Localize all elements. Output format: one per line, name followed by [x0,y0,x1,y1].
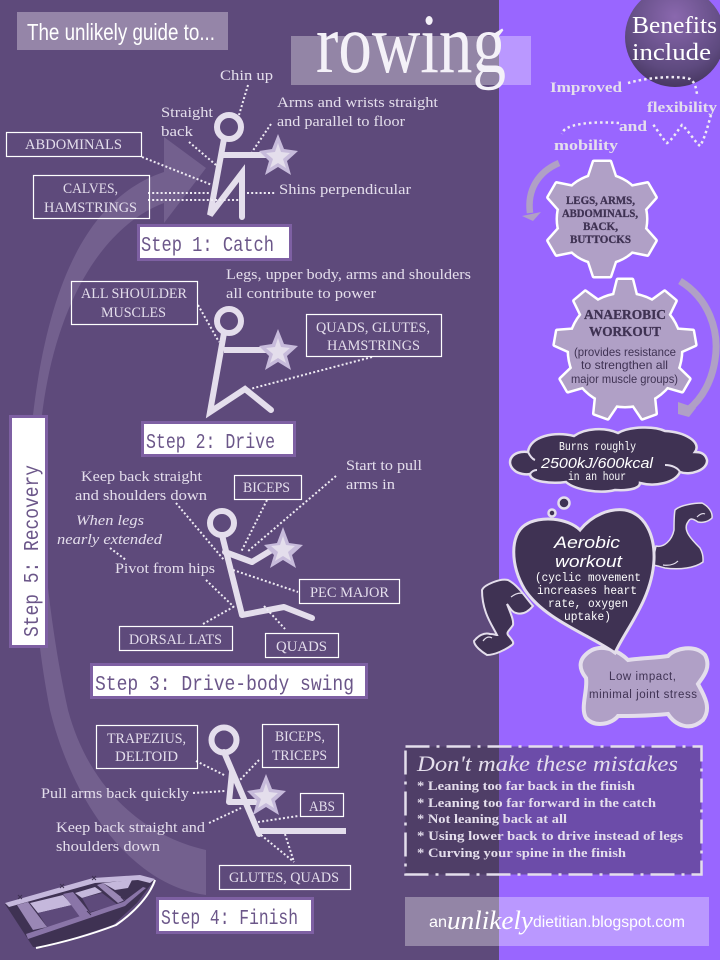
label: quads [266,634,338,658]
heading: step 3 [92,664,366,698]
heading: step 4: Step 4: Finish [161,908,298,931]
text: keep back straight: Keep back straight [81,469,203,485]
text: straight back: back [161,124,194,140]
icon: aerobic workout heart: (cyclic movement [535,571,641,585]
thought bubbles [548,498,570,516]
label: pec major: PEC MAJOR [310,585,389,601]
text: start to pull [346,458,422,493]
heading: step 4 [158,898,312,932]
text: arms and wrists: and parallel to floor [277,114,405,130]
cloud: calories burned [510,427,707,492]
panel: don't make these mistakes: * Leaning too far forward in the catch [417,795,657,810]
badge: benefits include [625,0,720,87]
icon: right flexed arm [652,503,712,569]
label: quads glutes hamstrings: HAMSTRINGS [327,338,420,354]
text: keep back straight [75,469,208,504]
text: improved flexibility and mobility: flexibility [647,100,718,116]
label: calves hamstrings [34,176,150,218]
label: trapezius deltoid: TRAPEZIUS, [107,731,186,747]
callouts: drive dotted leaders [198,305,372,389]
label: dorsal lats [120,626,232,650]
label: biceps [234,476,302,500]
label: biceps triceps: TRICEPS [272,748,327,764]
figure: drive stick figure [210,309,298,412]
text: legs upper body [226,267,471,302]
cloud: calories burned: 2500kJ/600kcal [540,455,654,472]
label: glutes quads [220,866,350,890]
text: improved flexibility and mobility: and [619,119,647,135]
icon: anaerobic workout gear: (provides resistance [574,345,676,359]
callouts: finish dotted leaders [193,760,298,862]
icon: aerobic workout heart: rate, oxygen [548,597,628,611]
label: quads glutes hamstrings: QUADS, GLUTES, [316,320,430,336]
label: all shoulder muscles: MUSCLES [101,305,166,321]
label: pec major [300,580,400,604]
label: dorsal lats: DORSAL LATS [129,632,222,648]
text: arms and wrists: Arms and wrists straight [277,95,439,111]
icon: aerobic workout heart: workout [555,552,623,571]
arrow: curved arrow into cloud [678,281,716,417]
footer: blog address: unlikely [447,906,533,935]
icon: aerobic workout heart: uptake) [564,610,611,624]
text: when legs nearly extended [57,513,163,548]
icon: rowing boat [5,875,155,948]
figure: finish stick figure [212,728,346,834]
text: keep back straight and shoulders: shoulders down [56,839,161,855]
icon: muscle groups gear: BACK, [583,221,618,233]
label: quads glutes hamstrings [306,314,442,356]
label: trapezius deltoid: DELTOID [115,749,178,765]
text: start to pull: arms in [346,477,396,493]
text: chin up: Chin up [220,68,273,84]
footer: blog address: dietitian.blogspot.com [533,914,685,931]
label: abs: ABS [309,799,335,815]
text: straight back: Straight [161,105,214,121]
icon: muscle groups gear: ABDOMINALS, [562,208,638,220]
title: the unlikely guide to [17,12,228,50]
heading: step 2 [142,422,294,456]
label: calves hamstrings: CALVES, [63,181,118,197]
label: glutes quads: GLUTES, QUADS [229,870,339,886]
icon: muscle groups gear: BUTTOCKS [570,234,631,246]
label: biceps: BICEPS [243,480,290,496]
step 1: catch [6,68,439,260]
heading: step 5 recovery: Step 5: Recovery [22,465,45,637]
background: right violet panel [499,0,720,960]
heading: step 5 recovery [10,416,46,646]
text: straight back [161,105,214,140]
icon: anaerobic workout gear: WORKOUT [589,325,662,340]
callouts: body swing dotted leaders [110,476,336,629]
text: improved flexibility and mobility [550,77,718,154]
text: improved flexibility and mobility: mobility [554,138,619,154]
heading: step 3: Step 3: Drive-body swing [95,674,354,697]
text: improved flexibility and mobility: Improved [550,80,622,96]
heading: step 1 [138,226,290,260]
badge: benefits include: Benefits [632,13,717,39]
icon: low impact bone: minimal joint stress [589,689,697,701]
icon: anaerobic workout gear: major muscle groups) [571,372,678,386]
icon: low impact bone: Low impact, [609,671,676,683]
title: the unlikely guide to: The unlikely guide to... [27,19,215,45]
background: left dark panel [0,0,499,960]
panel: don't make these mistakes [406,746,702,874]
text: shins perpendicular: Shins perpendicular [279,182,411,198]
text: when legs nearly extended: When legs [76,513,144,529]
step 2: drive [72,267,471,456]
panel: don't make these mistakes: * Curving your spine in the finish [417,845,627,860]
label: trapezius deltoid [96,726,198,768]
label: quads: QUADS [276,639,327,655]
icon: anaerobic workout gear: to strengthen all [581,358,668,372]
cloud: calories burned: Burns roughly [559,440,636,454]
text: keep back straight and shoulders: Keep back straight and [56,820,206,836]
heading: step 1: Step 1: Catch [141,235,274,258]
text: keep back straight and shoulders [56,820,206,855]
icon: aerobic workout heart [514,510,654,653]
cloud: calories burned: in an hour [568,470,626,484]
text: when legs nearly extended: nearly extended [57,532,163,548]
label: all shoulder muscles: ALL SHOULDER [81,286,187,302]
text: arms and wrists [277,95,439,130]
label: all shoulder muscles [72,282,198,324]
panel: don't make these mistakes: * Leaning too far back in the finish [417,778,636,793]
icon: left flexed arm [474,580,533,655]
icon: anaerobic workout gear: ANAEROBIC [584,308,666,323]
text: start to pull: Start to pull [346,458,422,474]
footer: blog address: an [429,914,447,931]
arrow: curved arrow into muscle gear [522,163,559,221]
panel: don't make these mistakes: * Not leaning back at all [417,811,567,826]
footer: blog address [405,897,709,946]
label: abdominals: ABDOMINALS [25,137,122,153]
arrow: large curved cycle arrow [30,137,206,895]
step 4: finish [41,724,350,932]
text: pull arms back: Pull arms back quickly [41,786,190,802]
step 3: drive body swing [57,458,422,698]
panel: don't make these mistakes: Don't make these mistakes [416,751,678,776]
label: biceps triceps: BICEPS, [275,729,325,745]
text: legs upper body: Legs, upper body, arms and shoulders [226,267,471,283]
badge: benefits include: include [632,40,711,66]
text: keep back straight: and shoulders down [75,488,208,504]
callouts: catch dotted leaders [142,85,276,200]
heading: step 2: Step 2: Drive [146,432,275,455]
label: biceps triceps [262,724,338,768]
label: calves hamstrings: HAMSTRINGS [44,200,137,216]
icon: low impact bone [581,648,707,726]
panel: don't make these mistakes: * Using lower back to drive instead of legs [417,828,683,843]
icon: aerobic workout heart: increases heart [537,584,637,598]
figure: catch stick figure [210,115,298,217]
figure: body swing stick figure [210,511,312,618]
label: abdominals [6,132,142,156]
icon: muscle groups gear: LEGS, ARMS, [566,195,635,207]
icon: aerobic workout heart: Aerobic [553,533,621,552]
icon: muscle groups gear [546,162,658,276]
text: pivot from hips: Pivot from hips [115,561,215,577]
text: legs upper body: all contribute to power [226,286,376,302]
label: abs [300,794,344,816]
icon: anaerobic workout gear [554,280,696,420]
